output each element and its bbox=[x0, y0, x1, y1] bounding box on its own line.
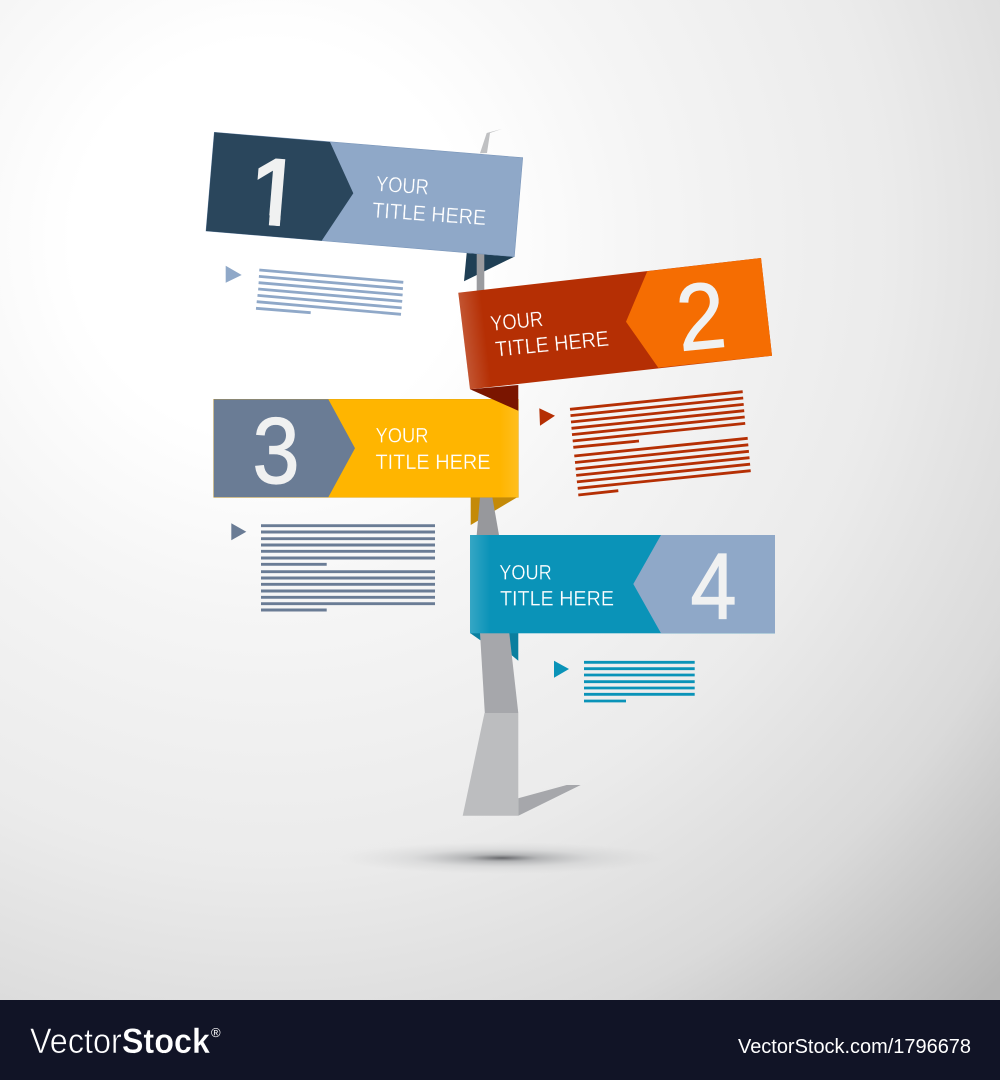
banner 4 title: TITLE HERE bbox=[500, 586, 614, 610]
number 4: 4 bbox=[691, 534, 736, 639]
panel: step 2 bbox=[458, 258, 772, 495]
arrow marker 3 bbox=[231, 523, 246, 540]
banner 1 body bbox=[206, 132, 523, 257]
banner 4 number tab bbox=[633, 535, 775, 633]
panel: step 3 bbox=[214, 398, 518, 610]
text lines 1 bbox=[256, 270, 403, 314]
banner 1 number tab bbox=[206, 132, 353, 241]
ground shadow bbox=[337, 842, 667, 874]
signpost bbox=[463, 129, 581, 816]
banner 2 number tab bbox=[626, 258, 772, 368]
banner 1 title: TITLE HERE bbox=[372, 198, 487, 230]
number 3: 3 bbox=[252, 398, 300, 503]
number 2: 2 bbox=[672, 262, 730, 372]
banner 2 fold bbox=[470, 385, 518, 411]
number 1: 1 bbox=[245, 138, 306, 247]
footer registered mark: ® bbox=[211, 1025, 221, 1040]
banner 3 number tab bbox=[214, 399, 355, 497]
banner 3 body bbox=[214, 399, 518, 497]
arrow marker 4 bbox=[554, 661, 569, 678]
banner 4 title: YOUR bbox=[499, 560, 552, 584]
banner 3 title: TITLE HERE bbox=[376, 450, 490, 474]
banner 3 right shading bbox=[500, 400, 518, 497]
ribbon folds behind the signpost bbox=[464, 253, 518, 661]
banner 1 title bbox=[372, 172, 489, 230]
arrow marker 2 bbox=[539, 408, 555, 426]
banner 2 title bbox=[489, 301, 610, 362]
banner 3 title bbox=[376, 424, 490, 474]
text lines 4 bbox=[584, 662, 695, 701]
panel: step 1 bbox=[206, 132, 523, 314]
footer logo: VectorStock bbox=[30, 1022, 210, 1061]
banner 3 title: YOUR bbox=[376, 424, 428, 448]
footer url: VectorStock.com/1796678 bbox=[738, 1036, 971, 1058]
banner 2 body bbox=[458, 258, 772, 389]
panel: step 4 bbox=[470, 534, 775, 701]
text lines 3 bbox=[261, 526, 435, 610]
arrow marker 1 bbox=[226, 266, 242, 283]
banner 2 title: YOUR bbox=[489, 307, 544, 336]
banner 2 left shading bbox=[458, 290, 492, 389]
footer bar bbox=[0, 1000, 1000, 1080]
banner 4 left shading bbox=[470, 535, 490, 633]
banner 4 title bbox=[499, 560, 614, 610]
banner 4 body bbox=[470, 535, 775, 633]
banner 2 title: TITLE HERE bbox=[494, 327, 610, 362]
text lines 2 bbox=[570, 392, 751, 495]
banner 1 title: YOUR bbox=[375, 172, 430, 199]
